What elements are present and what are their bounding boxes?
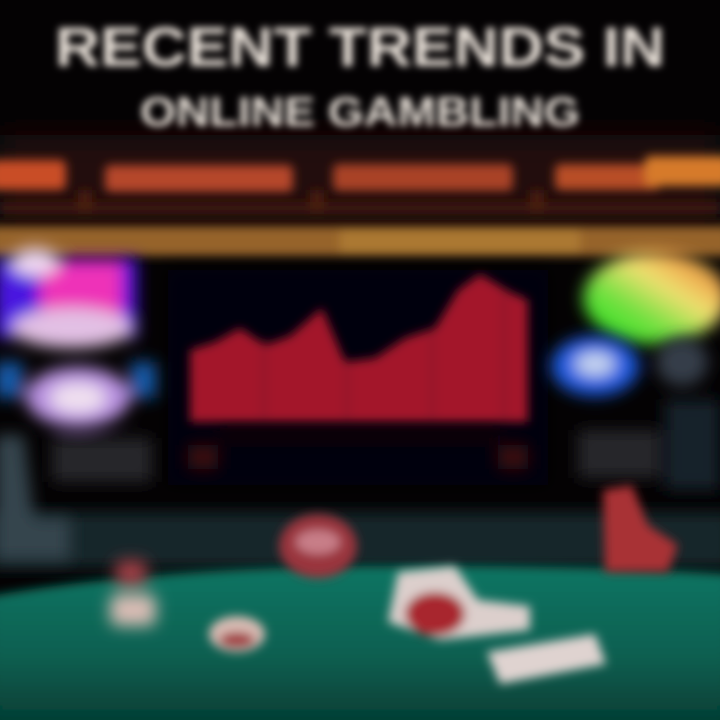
chip stack right bbox=[603, 485, 678, 572]
large chip bbox=[279, 514, 357, 578]
table rail bbox=[0, 512, 720, 568]
chart screen bbox=[168, 270, 548, 485]
chart base reflections bbox=[188, 432, 528, 469]
chip stack left bbox=[110, 560, 156, 626]
neon slot machine bbox=[0, 248, 156, 482]
left neon cluster bbox=[0, 248, 156, 482]
title bbox=[55, 15, 665, 135]
center cards bbox=[388, 566, 530, 640]
dark red strip reflections bbox=[0, 190, 720, 214]
small chip bbox=[209, 616, 265, 652]
light strip: orange panels bbox=[0, 156, 720, 192]
left stand bbox=[0, 435, 70, 560]
bar chart bbox=[190, 274, 528, 422]
gold band bbox=[0, 226, 720, 256]
bar ridges bbox=[262, 290, 506, 420]
right neon cluster bbox=[551, 252, 720, 490]
table felt bbox=[0, 566, 720, 720]
right cards bbox=[487, 634, 606, 684]
title: RECENT TRENDS IN bbox=[55, 15, 665, 78]
poker chips and cards bbox=[110, 485, 678, 684]
roulette wheel bbox=[583, 252, 720, 344]
title: ONLINE GAMBLING bbox=[140, 88, 580, 135]
back wall glow bbox=[0, 135, 720, 220]
blue light bbox=[551, 336, 720, 490]
